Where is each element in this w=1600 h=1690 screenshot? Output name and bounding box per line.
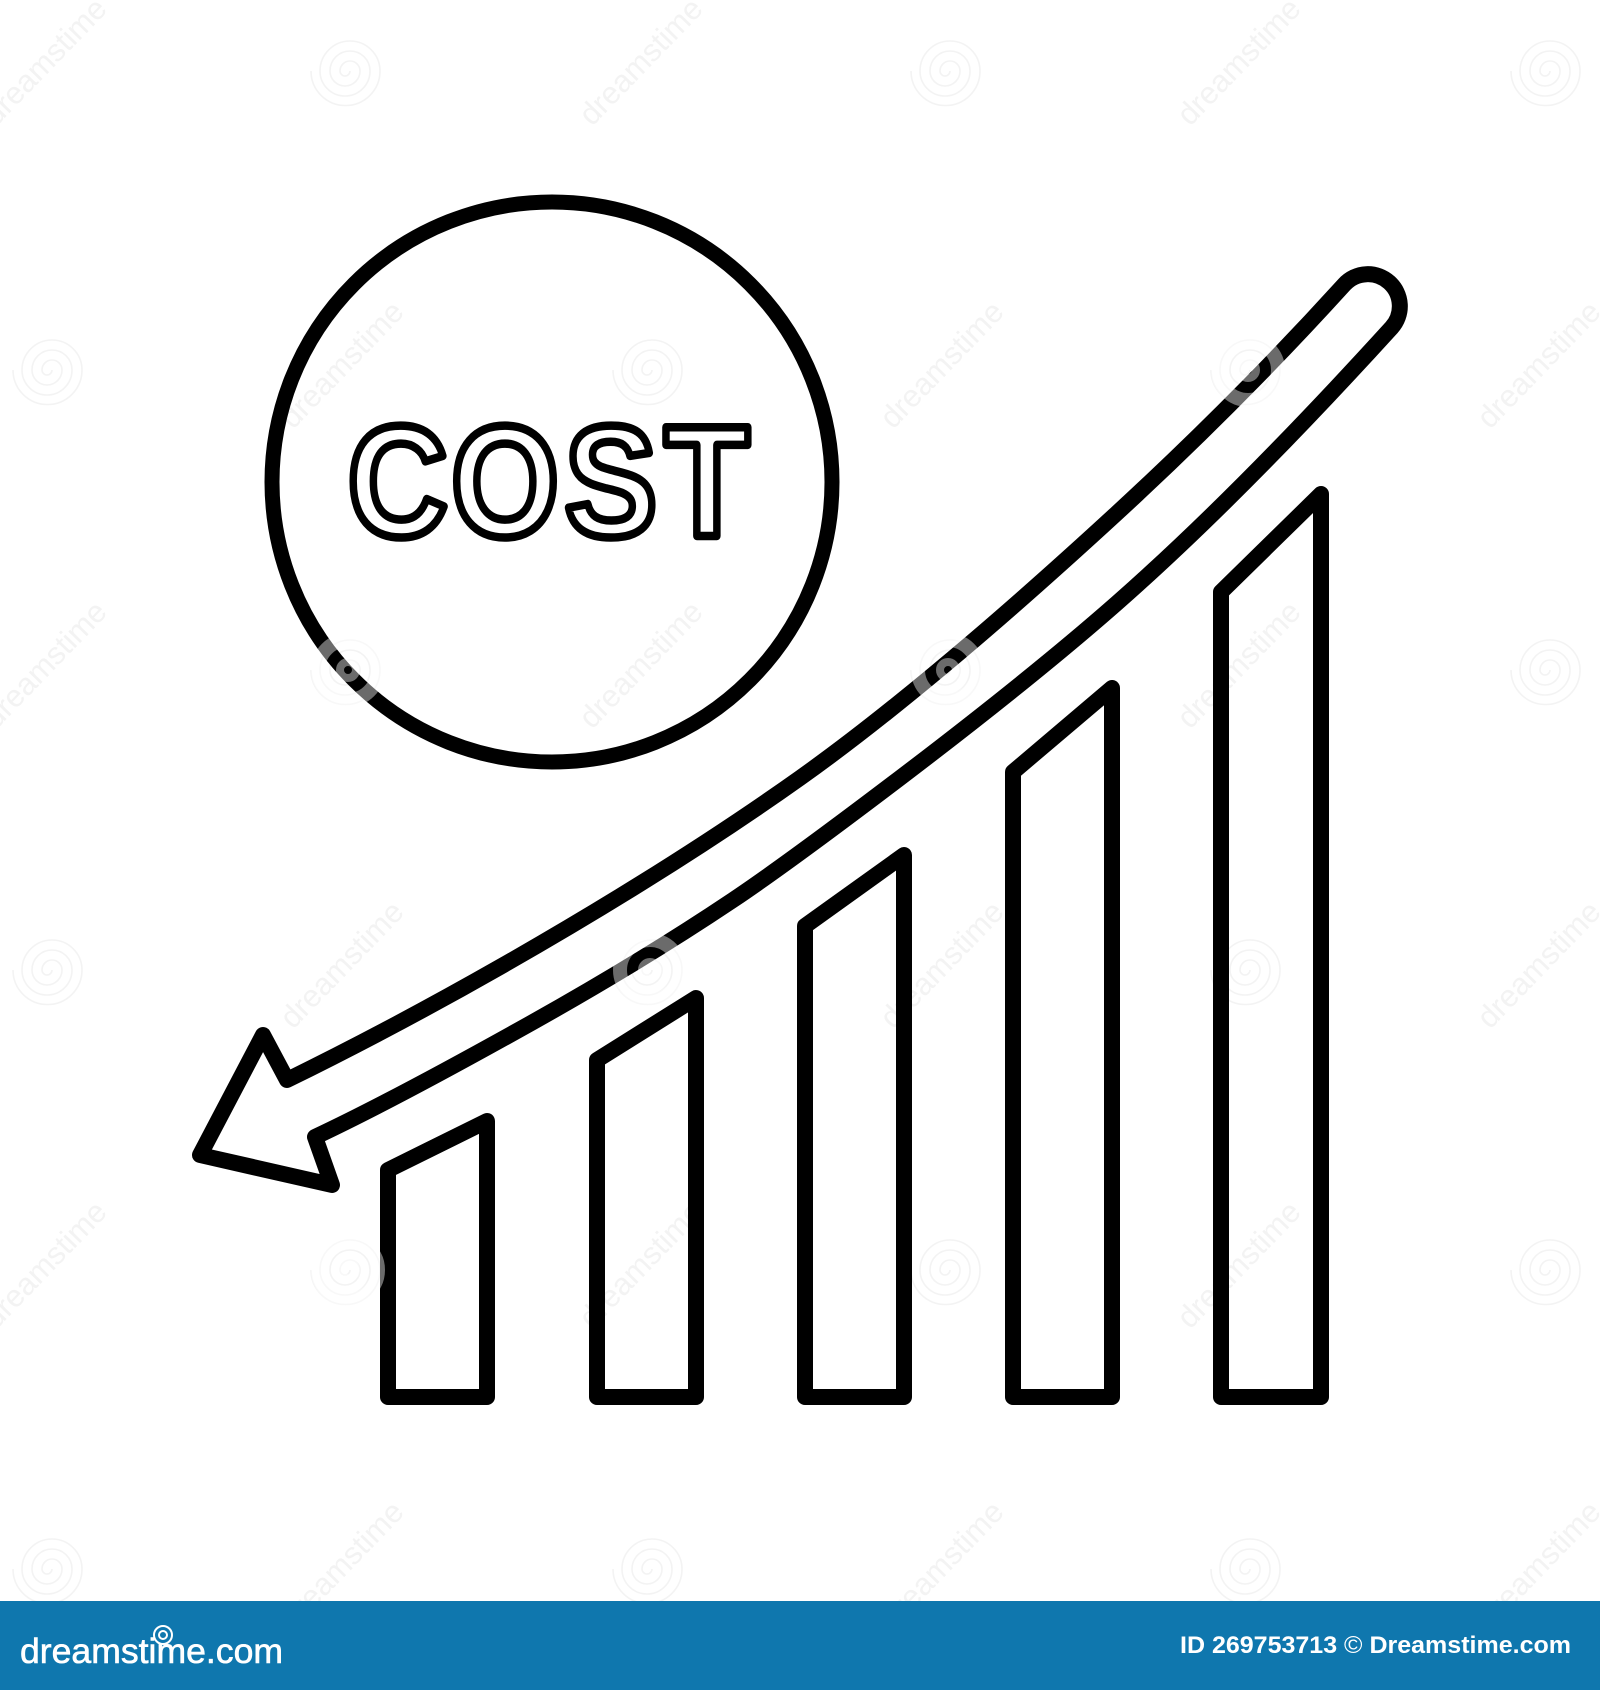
footer bar bbox=[0, 1601, 1600, 1690]
icon: cost badge bbox=[272, 202, 832, 762]
bar 2 bbox=[597, 998, 696, 1397]
bar chart: five rising bars bbox=[388, 494, 1321, 1397]
circle outline bbox=[272, 202, 832, 762]
watermark: spirals and rotated text: dreamstime bbox=[873, 294, 1011, 435]
watermark: spirals and rotated text: dreamstime bbox=[873, 894, 1011, 1035]
watermark: spirals and rotated text: dreamstime bbox=[273, 294, 411, 435]
watermark: spirals and rotated text: dreamstime bbox=[572, 594, 710, 735]
watermark: spirals and rotated text: dreamstime bbox=[273, 894, 411, 1035]
watermark: spirals and rotated text: dreamstime bbox=[572, 1194, 710, 1335]
watermark: spirals and rotated text: dreamstime bbox=[873, 1494, 1011, 1635]
bar 1 bbox=[388, 1121, 487, 1397]
label: COST: COST bbox=[348, 393, 749, 570]
watermark: spirals and rotated text: dreamstime bbox=[1170, 1194, 1308, 1335]
footer logo: dreamstime.com: dreamstime.com bbox=[20, 1632, 283, 1671]
bar 3 bbox=[805, 855, 904, 1397]
icon: logo spiral bbox=[154, 1626, 172, 1644]
watermark: spirals and rotated text: dreamstime bbox=[1170, 594, 1308, 735]
watermark overlay on lines bbox=[318, 340, 1278, 1300]
arrow: curved downward arrow bbox=[200, 274, 1400, 1185]
watermark: spirals and rotated text: dreamstime bbox=[273, 1494, 411, 1635]
footer credit text: ID 269753713 © Dreamstime.com bbox=[1180, 1632, 1571, 1659]
bar 5 bbox=[1221, 494, 1321, 1397]
bar 4 bbox=[1013, 688, 1112, 1397]
